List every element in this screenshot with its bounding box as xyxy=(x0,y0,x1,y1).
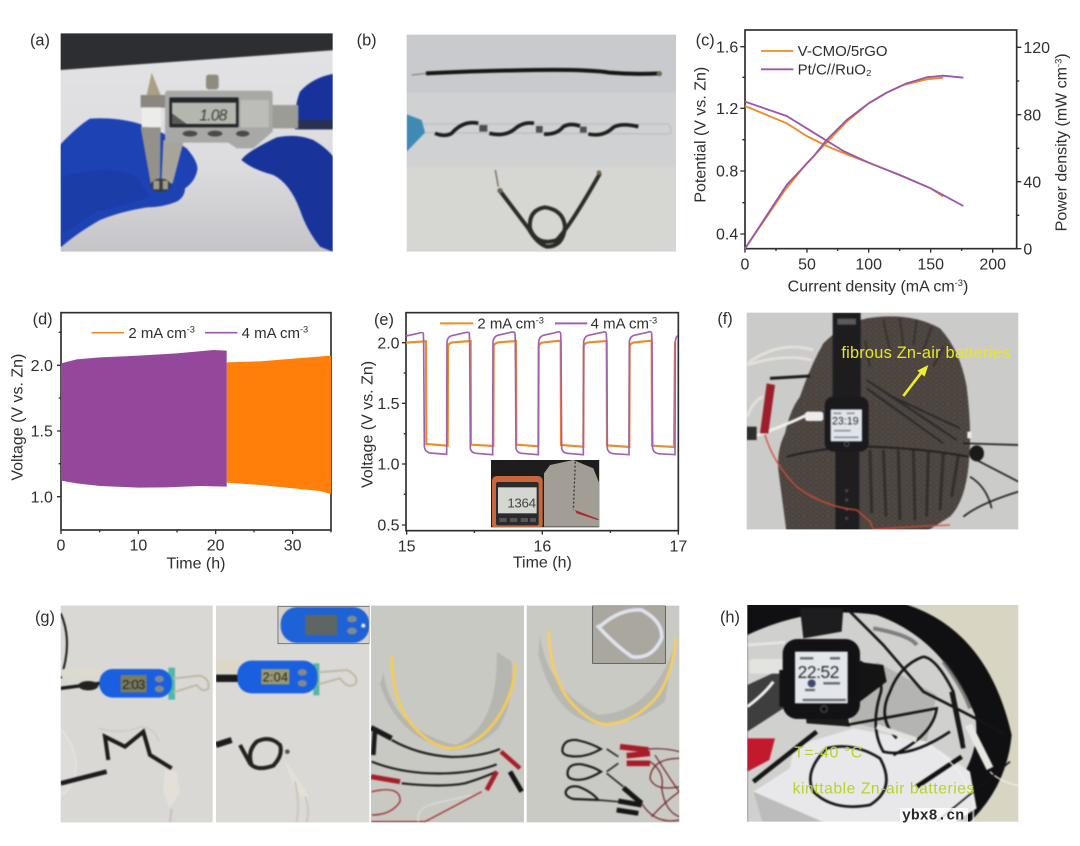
axes d: 0 xyxy=(57,537,66,554)
label c: (c) xyxy=(696,31,715,49)
label a: (a) xyxy=(30,32,50,50)
axes d: Voltage (V vs. Zn) xyxy=(10,354,27,481)
orange voltage profile xyxy=(406,341,675,447)
axes c: 0.8 xyxy=(716,164,738,181)
axes e xyxy=(360,313,687,572)
legend e: -3 xyxy=(649,315,657,325)
panel d: long-term cycling chart xyxy=(10,310,331,573)
axes e: 16 xyxy=(533,539,551,556)
purple discharge band xyxy=(61,350,227,488)
axes e: Voltage (V vs. Zn) xyxy=(360,361,377,488)
photo g4: LED strip with knotted batteries xyxy=(523,602,683,826)
panel b: flexible fibre photos xyxy=(357,31,680,255)
axes d: Time (h) xyxy=(167,556,225,573)
axes c: 80 xyxy=(1023,107,1041,124)
axes d: 30 xyxy=(284,537,302,554)
legend d: 2 mA cm xyxy=(128,325,187,342)
legend e xyxy=(440,315,657,333)
axes d: 1.0 xyxy=(31,489,53,506)
axes c: 120 xyxy=(1023,40,1050,57)
photo f: 23:19 xyxy=(832,416,859,428)
axes d: 2.0 xyxy=(31,358,53,375)
axes d: 20 xyxy=(207,537,225,554)
label g: (g) xyxy=(35,609,55,627)
axes c: 0 xyxy=(1023,241,1032,258)
curves c xyxy=(745,76,963,249)
photo g3: LED strip with three batteries xyxy=(368,602,527,826)
photo h xyxy=(743,602,1022,825)
legend d: 4 mA cm xyxy=(242,325,300,342)
legend c xyxy=(761,43,888,78)
watermark: ybx8.cn xyxy=(902,808,964,824)
inset photo: multimeter and fabric xyxy=(491,460,599,529)
axes e: 17 xyxy=(669,539,687,556)
axes c: 0 xyxy=(741,257,750,274)
panel f: beanie with watch photo xyxy=(717,309,1022,533)
axes e: 2.0 xyxy=(377,335,400,352)
panel h: low temperature watch photo xyxy=(720,602,1022,825)
legend e: 2 mA cm xyxy=(477,316,536,333)
panel e: charge-discharge cycles chart xyxy=(360,311,687,572)
axes c: 200 xyxy=(979,257,1006,274)
axes c xyxy=(692,30,1071,295)
label e: (e) xyxy=(374,311,394,329)
axes e: 1.5 xyxy=(377,396,400,413)
label b: (b) xyxy=(357,31,377,49)
photo g1: timer with bent battery: 2:03 xyxy=(122,677,145,692)
purple voltage profile xyxy=(406,332,678,455)
axes d: 10 xyxy=(129,537,147,554)
annotation: fibrous batteries xyxy=(841,344,1010,396)
legend c: Pt/C//RuO₂ xyxy=(798,61,872,78)
axes c: Current density (mA cm xyxy=(788,278,955,295)
legend d: -3 xyxy=(187,325,195,335)
legend d xyxy=(92,325,308,342)
inset photo: multimeter and fabric: 1364 xyxy=(507,495,537,510)
photo h: 22:52 xyxy=(798,662,839,682)
axes c: 150 xyxy=(917,257,944,274)
axes c: ) xyxy=(963,278,968,295)
axes c: 1.6 xyxy=(716,39,738,56)
axes c: 40 xyxy=(1023,174,1041,191)
axes e: Time (h) xyxy=(513,555,572,572)
axes d: 1.5 xyxy=(31,424,53,441)
photo a xyxy=(57,30,337,257)
panel c: polarization and power density chart xyxy=(692,30,1071,295)
axes c: 0.4 xyxy=(716,227,738,244)
photo b xyxy=(403,31,680,255)
legend e: 4 mA cm xyxy=(591,316,649,333)
photo f xyxy=(743,309,1022,533)
axes d xyxy=(10,313,331,573)
panel a: caliper photo xyxy=(30,30,337,257)
axes c: -3 xyxy=(955,278,963,288)
label f: (f) xyxy=(717,310,733,328)
label h: (h) xyxy=(720,608,740,626)
axes c: 1.2 xyxy=(716,101,738,118)
orange discharge band xyxy=(227,356,331,494)
annotation: knittable batteries: kinttable Zn-air batteries xyxy=(793,781,975,798)
annotation: fibrous batteries: fibrous Zn-air batteries xyxy=(841,344,1010,362)
axes c: Power density (mW cm xyxy=(1054,67,1071,231)
axes e: 0.5 xyxy=(377,518,400,535)
panel g: flexible device demonstrations xyxy=(35,602,683,826)
legend c: V-CMO/5rGO xyxy=(798,43,888,60)
axes c: ) xyxy=(1054,53,1071,59)
photo g1: timer with bent battery xyxy=(57,602,216,826)
axes c: -3 xyxy=(1053,59,1063,67)
photo g2: timer with knotted battery xyxy=(213,602,373,826)
axes c: Potential (V vs. Zn) xyxy=(692,67,709,203)
legend e: -3 xyxy=(536,315,544,325)
photo g2: timer with knotted battery: 2:04 xyxy=(263,671,288,685)
axes e: 1.0 xyxy=(377,457,400,474)
axes c: 50 xyxy=(798,257,816,274)
legend d: -3 xyxy=(300,325,308,335)
annotation: temperature: T=-40 °C xyxy=(794,745,862,762)
label d: (d) xyxy=(33,310,53,328)
axes c: 100 xyxy=(855,257,882,274)
photo a: 1.08 xyxy=(199,108,228,125)
axes e: 15 xyxy=(398,539,416,556)
